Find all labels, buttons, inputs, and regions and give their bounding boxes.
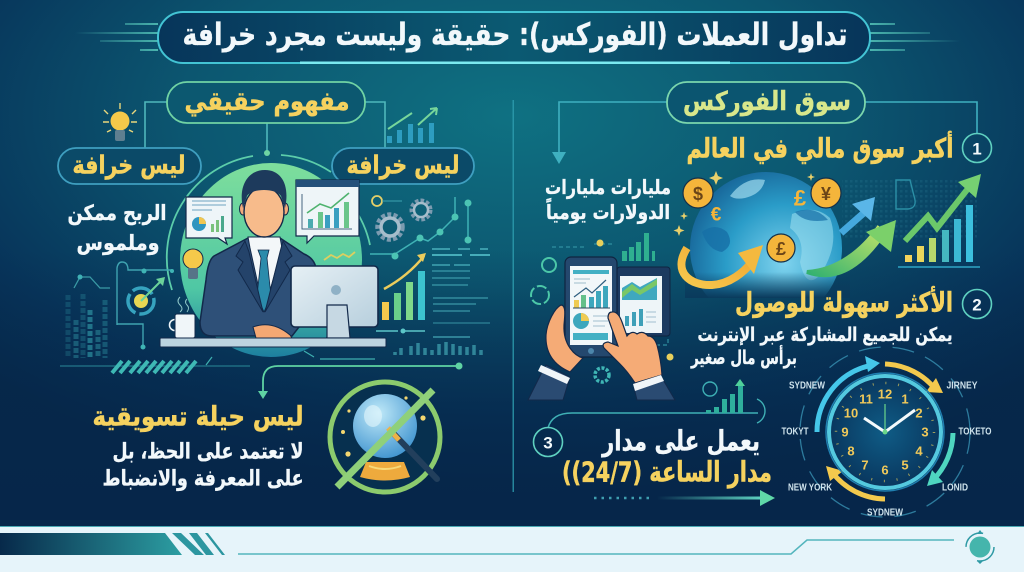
clock numbers: 8 — [847, 444, 855, 458]
title text: تداول العملات (الفوركس): حقيقة وليست مجرد خرافة — [182, 17, 848, 53]
title banner — [75, 12, 960, 64]
small bars — [622, 233, 655, 261]
report card — [186, 197, 232, 244]
green disc — [180, 163, 362, 357]
small icons around devices — [531, 244, 668, 345]
footer line — [238, 540, 954, 554]
icon: small growth chart — [387, 108, 437, 143]
step 2 text: يمكن للجميع المشاركة عبر الإنترنت — [698, 324, 952, 346]
world map dots — [842, 178, 977, 240]
step 2 text: الأكثر سهولة للوصول — [735, 286, 953, 318]
coins: $ — [693, 184, 703, 204]
phone — [565, 257, 617, 357]
clock numbers: 3 — [921, 424, 929, 440]
chart window — [296, 180, 359, 243]
step 2 text — [690, 286, 992, 369]
illustration: trader at desk — [160, 150, 386, 357]
coins: £ — [776, 239, 786, 259]
text: not a marketing trick: على المعرفة والانضباط — [102, 466, 304, 492]
icon: crossed-out crystal ball — [330, 382, 440, 492]
shirt and tie — [248, 237, 282, 312]
city labels: JIRNEY — [946, 380, 978, 392]
clock face — [829, 376, 941, 488]
step 3 connector and chart — [548, 379, 765, 428]
step 1 heading: أكبر سوق مالي في العالم — [686, 130, 954, 164]
cycle arrows — [817, 364, 953, 499]
bar chart with green trend — [898, 174, 981, 267]
city labels: SYDNEW — [789, 380, 825, 392]
city labels: SYDNEW — [867, 508, 903, 518]
step 3 text: يعمل على مدار — [600, 424, 760, 458]
clock hands — [864, 404, 915, 434]
coins: € — [711, 204, 722, 226]
heading: forex market: سوق الفوركس — [683, 87, 851, 117]
pixel bar columns — [68, 294, 105, 358]
illustration: globe with currencies — [674, 171, 977, 298]
footer — [0, 526, 1024, 572]
step 3 text — [534, 424, 772, 488]
hand — [253, 325, 292, 338]
small waveform — [395, 342, 481, 355]
city labels: NEW YORK — [788, 482, 833, 494]
step 1 heading: 1 — [972, 140, 982, 158]
pill: not a myth right — [332, 148, 474, 184]
city labels: TOKYT — [782, 426, 808, 438]
data readout — [432, 249, 490, 337]
connectors: forex market — [552, 102, 977, 164]
text: not a marketing trick — [92, 402, 304, 492]
clock numbers: 2 — [915, 406, 923, 420]
step 3 text: مدار الساعة (24/7)) — [562, 456, 772, 488]
heading: forex market — [667, 82, 865, 123]
step 3 text: 3 — [543, 434, 553, 452]
clock numbers: 1 — [901, 392, 909, 406]
suit — [200, 238, 320, 336]
clock numbers: 7 — [861, 458, 869, 472]
arrow under step 3 — [594, 490, 775, 506]
yellow arrow — [681, 245, 763, 285]
clock numbers: 10 — [844, 406, 858, 420]
connectors: real concept — [145, 102, 385, 152]
green arrow — [807, 220, 896, 275]
clock numbers: 6 — [881, 462, 889, 478]
heading: real concept: مفهوم حقيقي — [184, 87, 350, 117]
back tablet — [617, 267, 670, 336]
small gear — [595, 368, 609, 382]
icon: lightbulb — [103, 103, 137, 141]
pill: not a myth left — [58, 148, 201, 184]
text: billions of dollars: الدولارات يومياً — [546, 198, 670, 224]
clock numbers — [841, 386, 929, 478]
clock numbers: 5 — [901, 458, 909, 472]
clock numbers: 4 — [915, 444, 923, 458]
footer logo — [966, 530, 994, 564]
center divider — [512, 100, 514, 492]
coffee cup — [170, 297, 195, 338]
step 2 text: 2 — [972, 296, 982, 314]
coins — [674, 171, 841, 262]
city labels — [782, 380, 992, 518]
text: not a marketing trick: لا تعتمد على الحظ، بل — [112, 440, 304, 464]
pill: not a myth right: ليس خرافة — [346, 150, 460, 180]
city labels: LONID — [942, 482, 968, 494]
coins: ¥ — [821, 184, 831, 204]
head — [240, 170, 288, 237]
right hand — [603, 312, 662, 383]
dashed orbit — [800, 347, 970, 517]
clock numbers: 9 — [841, 424, 849, 440]
small lightbulb — [183, 249, 203, 279]
left side decoration: target chart — [74, 262, 174, 350]
hatch stripe — [60, 351, 375, 373]
text: billions of dollars: مليارات مليارات — [545, 175, 671, 199]
connector arrow to marketing — [258, 362, 462, 399]
clock diagram — [782, 347, 992, 518]
clock numbers: 12 — [878, 386, 892, 402]
clock numbers: 11 — [859, 392, 873, 406]
icon: gears — [372, 196, 430, 240]
text: profit is possible — [68, 201, 166, 255]
bar chart with arrow — [382, 253, 426, 320]
footer band — [0, 533, 225, 555]
heading: real concept — [167, 82, 365, 123]
step 2 text: برأس مال صغير — [690, 345, 797, 369]
panel: real concept — [58, 82, 490, 492]
network line — [370, 197, 472, 260]
text: profit is possible: وملموس — [76, 231, 160, 255]
text: billions of dollars — [545, 175, 671, 224]
monitor — [291, 266, 378, 338]
coins: £ — [794, 186, 807, 210]
sleeves — [528, 365, 675, 400]
desk — [160, 338, 386, 347]
city labels: TOKETO — [958, 426, 992, 438]
left hand — [546, 305, 583, 372]
icon: money bag outline — [896, 180, 915, 209]
pill: not a myth left: ليس خرافة — [72, 150, 186, 180]
panel: forex market — [528, 82, 992, 518]
lapels — [236, 241, 292, 312]
text: profit is possible: الربح ممكن — [68, 201, 166, 225]
illustration: hands holding devices — [528, 233, 675, 400]
text: not a marketing trick: ليس حيلة تسويقية — [92, 402, 304, 432]
blue arrow — [841, 197, 875, 233]
